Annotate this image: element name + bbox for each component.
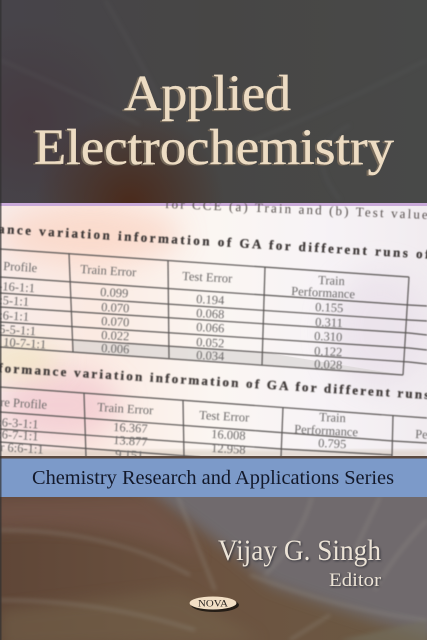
editor credit: Vijay G. Singh <box>218 534 381 567</box>
series name: Chemistry Research and Applications Series <box>32 467 394 489</box>
table 1: Train Error <box>80 262 138 279</box>
table 1: 0.034 <box>196 348 225 364</box>
table 2: Test Error <box>199 408 250 425</box>
bottom background <box>0 497 427 640</box>
caption lines <box>0 196 427 402</box>
table 1: 0.006 <box>101 341 130 356</box>
table 2: Train Error <box>97 400 155 417</box>
table 1: 0.155 <box>315 300 344 315</box>
pink and violet light rays <box>0 203 427 457</box>
table 2: 16.008 <box>211 427 246 443</box>
table 1: Test Error <box>182 269 233 286</box>
table 1: 0.052 <box>196 335 225 350</box>
table 1: Train <box>318 273 346 288</box>
table 1: 0.070 <box>101 300 130 315</box>
table 1: 0.070 <box>101 314 130 329</box>
title: Applied <box>124 66 291 122</box>
series band <box>0 456 427 497</box>
table 1: 0.311 <box>315 315 343 330</box>
publisher logo: Nova oval: NOVA <box>198 600 228 610</box>
table 1: 0.066 <box>196 320 225 335</box>
table 1: 10-7-1:1 <box>3 335 47 352</box>
editor credit: Editor <box>329 570 382 591</box>
photo panel: skewed data tables <box>0 196 427 462</box>
table 1: 0.068 <box>196 306 225 321</box>
table 2: r 6:6-1:1 <box>0 440 44 457</box>
title: Electrochemistry <box>34 120 395 176</box>
table 2 <box>0 387 427 462</box>
table 2: Train <box>319 410 347 425</box>
table shading <box>73 340 403 375</box>
table 2: re Profile <box>0 395 48 412</box>
top background <box>0 0 427 203</box>
caption lines: ance variation information of GA for different runs of <box>0 221 427 262</box>
editor credit <box>218 534 382 591</box>
publisher logo: Nova oval <box>190 596 239 612</box>
caption lines: formance variation information of GA for different runs <box>0 360 427 402</box>
table 1: 0.122 <box>314 344 343 359</box>
table 1: 0.022 <box>101 328 130 343</box>
table 1: 0.099 <box>100 285 129 300</box>
table 2: Performance <box>294 422 359 439</box>
table 2: 9.151 <box>115 447 144 462</box>
title <box>34 66 395 176</box>
table 2: 13.877 <box>113 433 148 449</box>
table 1: 0.310 <box>314 329 343 344</box>
table 2: 12.958 <box>211 441 246 457</box>
table 1: Profile <box>3 259 38 275</box>
table 1 <box>0 249 427 375</box>
table 2: 16.367 <box>113 420 148 436</box>
table 2: 0.795 <box>318 436 347 451</box>
left edge strip <box>0 0 2 640</box>
table 1: Performance <box>291 284 356 301</box>
table 1: 0.194 <box>196 292 225 308</box>
table 1: 0.028 <box>314 357 343 372</box>
